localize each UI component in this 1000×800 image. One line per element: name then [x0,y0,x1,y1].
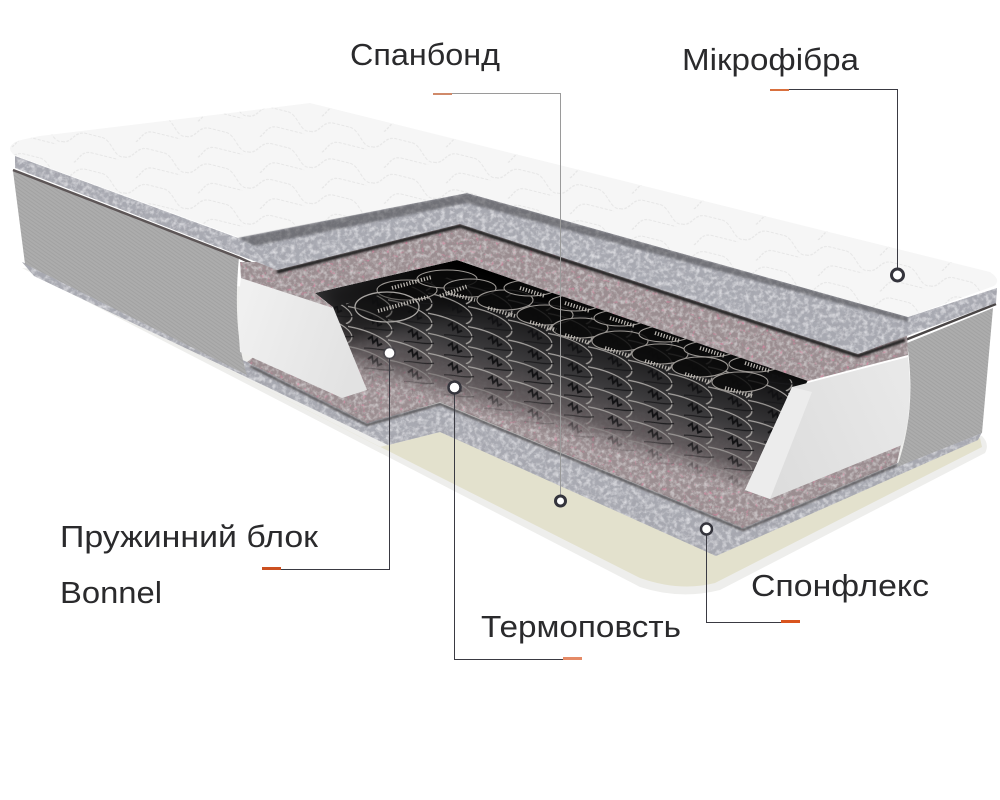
label: Термоповсть: Термоповсть [481,609,681,644]
seam: right [880,304,996,350]
spring ladder wires [378,277,770,396]
mattress cutaway illustration [10,103,997,594]
upper pink felt layer [240,220,908,381]
callout: Мікрофібра [682,42,904,281]
foam block: right [745,357,910,499]
lower pink felt layer [247,300,902,528]
callout: Термоповсть [448,382,681,660]
microfibre top layer [10,103,997,317]
callout: Спонфлекс [701,524,929,623]
callout: Спанбонд [350,37,566,506]
callout: Пружинний блок Bonnel [60,346,396,610]
dark shadow under the microfibre top [238,193,908,322]
label: Пружинний блок: Пружинний блок [60,519,318,554]
base: cream layer [30,270,982,587]
seam: left [13,170,262,268]
label: Мікрофібра: Мікрофібра [682,42,860,77]
label: Спонфлекс: Спонфлекс [751,568,929,603]
upper grey felt layer [15,156,997,354]
label: Спанбонд: Спанбонд [350,37,500,72]
spring coil rings [377,270,781,392]
side fabric: left [13,171,247,375]
base: white board [22,268,987,594]
side fabric: right [897,308,993,467]
spring block [315,258,808,500]
foam block: left [239,277,367,398]
lower felt layer [22,262,982,556]
dark line under upper grey felt [277,226,905,356]
dark line under lower pink felt [250,366,897,530]
label: Bonnel: Bonnel [60,575,162,610]
